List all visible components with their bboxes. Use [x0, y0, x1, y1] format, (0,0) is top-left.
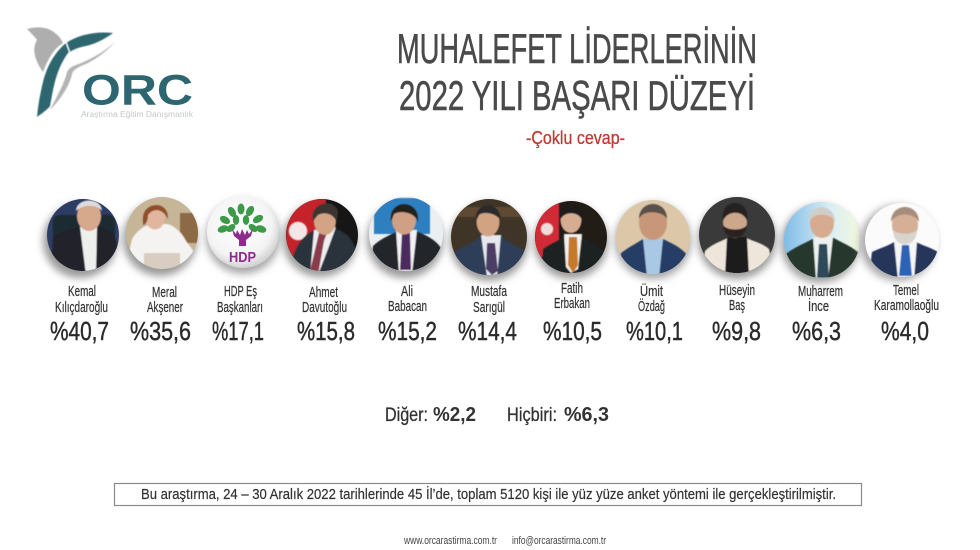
subtitle: -Çoklu cevap- — [526, 128, 625, 148]
value: %35,6 — [130, 316, 191, 346]
name: Kemal — [68, 284, 96, 300]
name — [638, 282, 665, 315]
leader: Temel Karamollaoğlu — [860, 203, 939, 346]
name — [798, 284, 843, 315]
value: %4,0 — [881, 316, 929, 346]
methodology note: Bu araştırma, 24 – 30 Aralık 2022 tarihlerinde 45 İl’de, toplam 5120 kişi ile yüz yüze anket yöntemi ile gerçekleştirilmiştir. — [141, 485, 836, 503]
name — [147, 285, 183, 316]
leader: Meral Akşener — [123, 197, 200, 346]
name: Temel — [893, 283, 919, 299]
name: İnce — [808, 297, 829, 315]
portrait — [781, 202, 862, 283]
leader: Fatih Erbakan — [534, 201, 608, 346]
name: Fatih — [561, 281, 583, 297]
name: Ümit — [640, 282, 663, 300]
portrait — [860, 203, 939, 281]
name: Muharrem — [798, 284, 843, 300]
value: %6,3 — [792, 316, 841, 346]
value: %10,5 — [543, 316, 602, 346]
name: Başkanları — [217, 300, 263, 316]
value: %17,1 — [212, 316, 264, 346]
leader: Muharrem İnce — [781, 202, 862, 346]
name: Erbakan — [554, 296, 590, 312]
name: Babacan — [388, 299, 427, 315]
portrait — [283, 199, 360, 277]
other: Hiçbiri — [507, 404, 609, 426]
name: Baş — [729, 298, 745, 314]
portrait — [615, 200, 691, 279]
leader: Ümit Özdağ — [615, 200, 691, 346]
name: Özdağ — [638, 297, 665, 315]
name — [719, 283, 755, 314]
name — [471, 284, 508, 316]
logo: ORC — [27, 27, 194, 119]
leader: Hüseyin Baş — [698, 197, 776, 346]
name — [55, 284, 108, 316]
name — [874, 283, 939, 314]
footer contacts: www.orcarastirma.com.tr — [403, 535, 497, 547]
name: Kılıçdaroğlu — [55, 300, 108, 316]
portrait — [534, 201, 608, 279]
name: Ahmet — [309, 285, 338, 301]
other: Hiçbiri: Hiçbiri: — [507, 405, 557, 426]
value: %14,4 — [458, 316, 517, 346]
value: %9,8 — [712, 316, 761, 346]
logo wordmark: ORC — [82, 66, 193, 114]
name: Akşener — [147, 300, 183, 316]
leader: Ali Babacan — [367, 197, 444, 346]
name: Karamollaoğlu — [874, 298, 939, 314]
value: %10,1 — [626, 316, 683, 346]
party: HDP Eş Başkanları — [206, 196, 280, 346]
other: Hiçbiri: %6,3 — [564, 404, 609, 426]
icon: purple hands — [232, 229, 253, 246]
portrait — [367, 197, 444, 278]
footer contacts — [403, 535, 606, 547]
portrait — [698, 197, 776, 279]
portrait: HDP logo — [206, 196, 280, 274]
name: Hüseyin — [719, 283, 755, 299]
icon: tree leaves — [217, 204, 267, 234]
other: Diğer: Diğer: — [385, 405, 428, 426]
name: Meral — [152, 285, 177, 301]
portrait — [123, 197, 200, 276]
name: Davutoğlu — [302, 300, 347, 316]
name — [554, 281, 590, 312]
other: Diğer — [385, 404, 476, 426]
footer contacts: info@orcarastirma.com.tr — [512, 535, 606, 547]
name — [388, 284, 427, 315]
other: Diğer: %2,2 — [433, 404, 476, 426]
name — [217, 284, 263, 316]
portrait — [43, 199, 121, 278]
HDP wordmark: HDP — [229, 249, 256, 266]
logo mark — [27, 27, 115, 117]
value: %15,2 — [378, 316, 437, 346]
title: 2022 YILI BAŞARI DÜZEYİ — [399, 72, 755, 119]
title: MUHALEFET LİDERLERİNİN — [397, 25, 757, 72]
name: Sarıgül — [473, 300, 505, 316]
name: Ali — [401, 284, 413, 300]
portrait — [450, 199, 528, 281]
name: HDP Eş — [224, 284, 257, 300]
value: %40,7 — [50, 316, 109, 346]
methodology note — [114, 484, 862, 506]
leader: Kemal Kılıçdaroğlu — [43, 199, 121, 346]
leader: Mustafa Sarıgül — [450, 199, 528, 346]
name: Mustafa — [471, 284, 508, 300]
leader: Ahmet Davutoğlu — [283, 199, 360, 346]
title — [397, 25, 757, 119]
logo tagline: Araştırma Eğitim Danışmanlık — [81, 110, 194, 119]
name — [302, 285, 347, 316]
value: %15,8 — [297, 316, 355, 346]
